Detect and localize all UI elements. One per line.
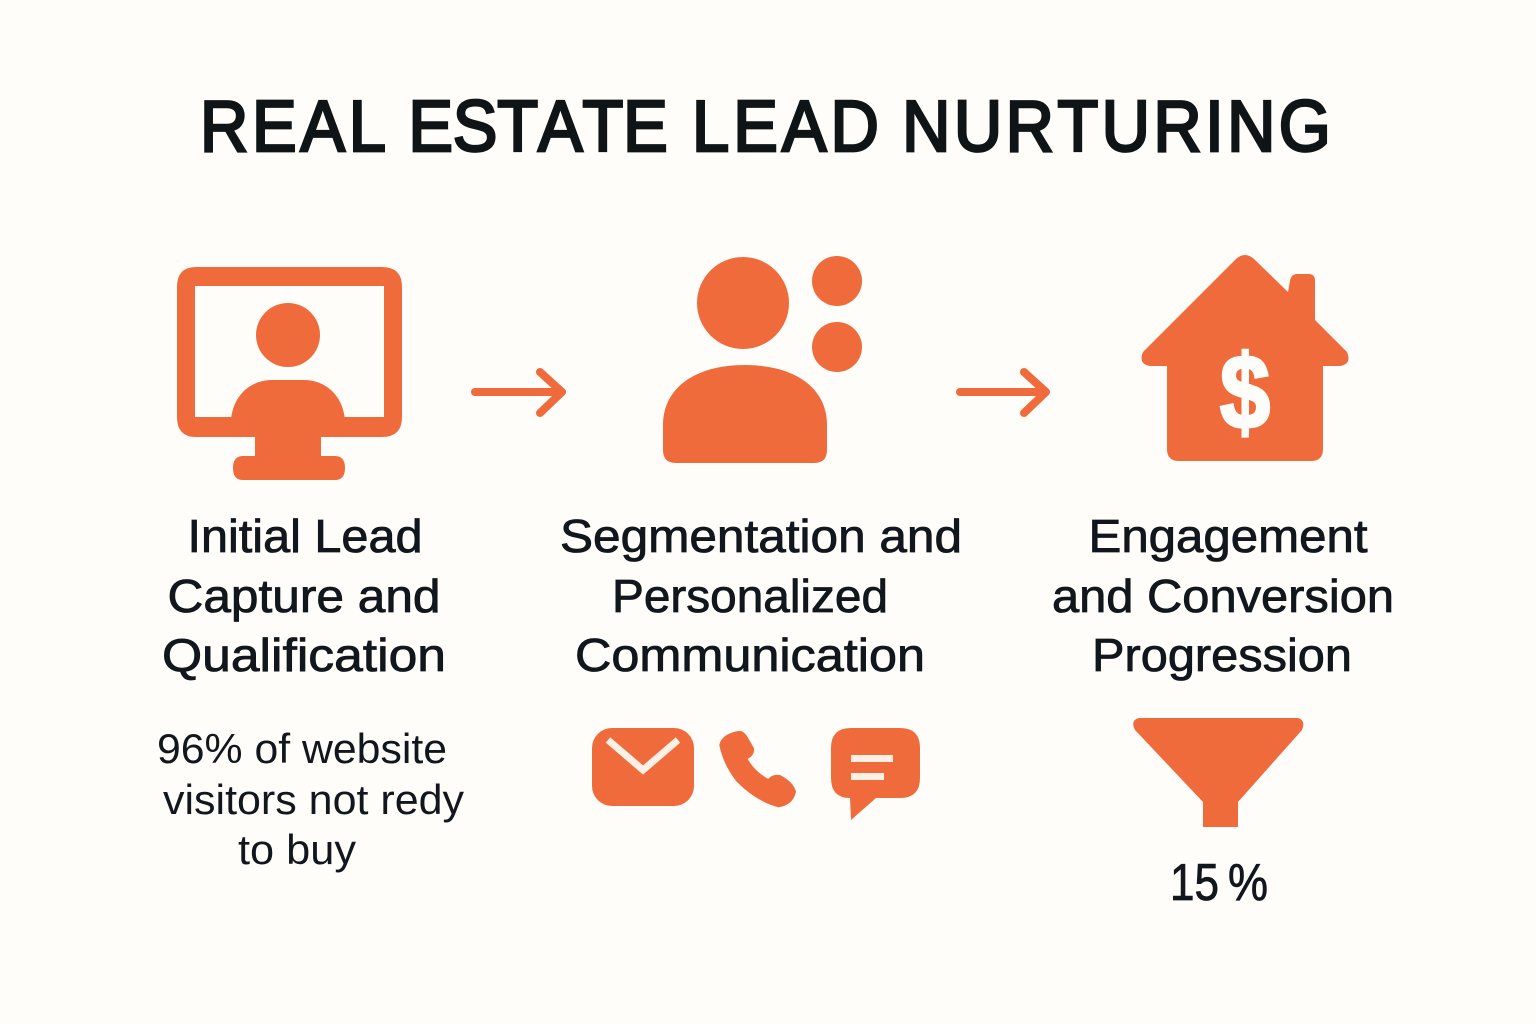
title: NURTURING — [902, 86, 1331, 167]
icon: person with segments — [663, 256, 862, 463]
heading: step 1: Capture and — [168, 570, 440, 622]
arrow: step 2 to step 3 — [960, 372, 1046, 413]
text: website visitors statistic: visitors not redy — [163, 776, 464, 823]
title: ESTATE — [408, 86, 668, 167]
icon: house with dollar sign — [1142, 255, 1348, 461]
arrow: step 1 to step 2 — [475, 372, 562, 413]
text: website visitors statistic: to buy — [238, 826, 356, 873]
heading: step 1: Qualification — [162, 629, 446, 681]
icon: person on monitor — [177, 267, 402, 480]
title: REAL — [200, 86, 386, 167]
heading: step 2: Segmentation and — [560, 510, 962, 562]
icon: phone — [719, 731, 796, 807]
icon: house with dollar sign: $ — [1220, 332, 1270, 451]
heading: step 3: and Conversion — [1052, 570, 1394, 622]
heading: step 3 — [1052, 510, 1394, 681]
icon: chat bubble — [831, 728, 920, 820]
heading: step 2: Communication — [575, 629, 925, 681]
text: conversion percentage: % — [1228, 854, 1268, 912]
heading: step 3: Engagement — [1088, 510, 1368, 562]
icon: envelope — [592, 728, 694, 806]
heading: step 1: Initial Lead — [188, 510, 422, 562]
heading: step 1 — [162, 510, 446, 681]
text: conversion percentage: 15 — [1170, 854, 1219, 912]
heading: step 3: Progression — [1092, 629, 1352, 681]
icon: funnel — [1133, 718, 1303, 827]
heading: step 2 — [560, 510, 962, 681]
text: website visitors statistic — [157, 725, 464, 873]
text: website visitors statistic: 96% of website — [157, 725, 447, 772]
title: LEAD — [692, 86, 879, 167]
heading: step 2: Personalized — [612, 570, 888, 622]
